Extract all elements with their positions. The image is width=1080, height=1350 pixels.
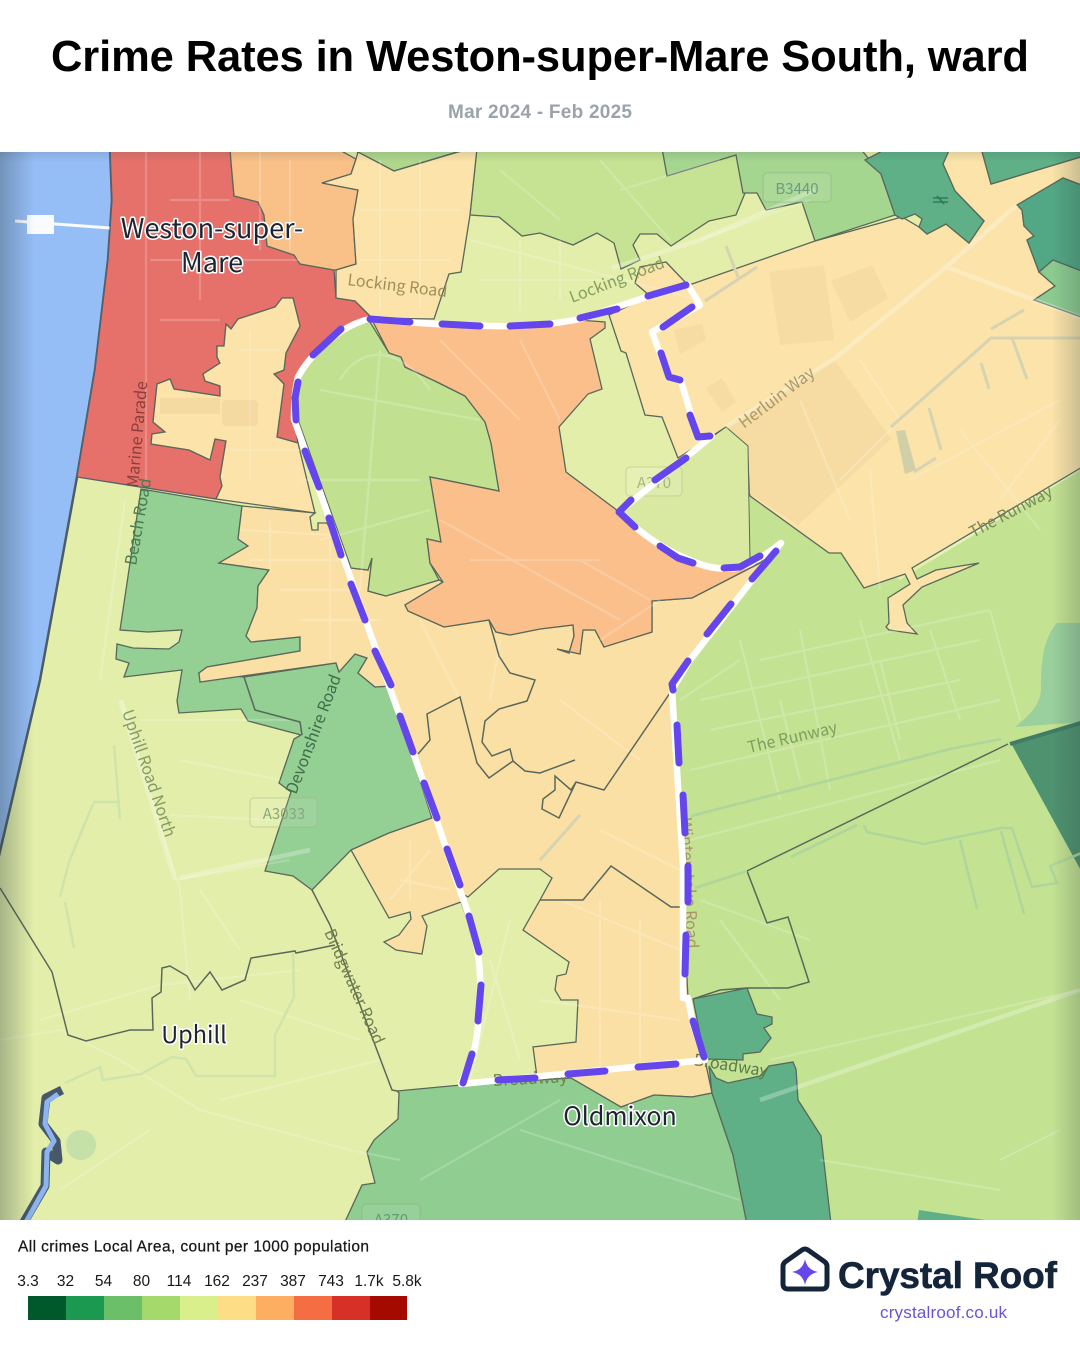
road label: Devonshire Road: Devonshire Road — [278, 670, 346, 797]
legend scale values: 5.8k — [392, 1273, 422, 1290]
faint channels Uphill — [60, 745, 294, 1083]
road label: Broadway east: Broadway — [692, 1046, 771, 1082]
place label: Weston-super-Mare: Mare — [181, 241, 243, 280]
region: cream north — [322, 148, 477, 319]
region: north-east medium green — [662, 148, 895, 241]
main roads — [120, 190, 1080, 1100]
road label: Bridgwater Road: Bridgwater Road — [319, 924, 392, 1048]
region: cream centre — [199, 506, 781, 1107]
region: dark green south pocket — [693, 988, 772, 1060]
other boundary lines — [0, 620, 1008, 1091]
legend scale values: 743 — [318, 1273, 344, 1290]
road label: Winterstoke Road: Winterstoke Road — [675, 817, 706, 949]
badge: B3440: B3440 — [775, 178, 819, 199]
badge: A370 south — [362, 1204, 420, 1233]
taxiway marks — [540, 246, 1080, 860]
title: Crime Rates in Weston-super-Mare South, ward — [51, 33, 1029, 81]
region: south green Oldmixon — [344, 1078, 747, 1224]
place label: Weston-super-Mare: Weston-super- — [121, 207, 303, 246]
legend scale values: 54 — [95, 1273, 112, 1290]
road label: The Runway east: The Runway — [964, 478, 1057, 542]
icon: house with star — [783, 1249, 827, 1289]
region: medium green right — [1034, 260, 1080, 318]
legend scale values: 114 — [167, 1273, 192, 1290]
road label: Herluin Way: Herluin Way — [733, 359, 819, 433]
region: south-east dark field — [1012, 723, 1080, 876]
coastline — [0, 148, 112, 860]
town-centre building blocks — [160, 398, 258, 426]
icon: railway station — [933, 196, 948, 204]
badge: B3440 — [763, 173, 831, 202]
region: dark green right — [1017, 178, 1080, 272]
dark drain line — [1010, 722, 1080, 744]
region: orange inside ward — [372, 320, 760, 654]
region: north green — [470, 148, 745, 269]
river — [24, 1090, 62, 1222]
legend scale values: 1.7k — [354, 1273, 384, 1290]
pond — [66, 1130, 96, 1160]
region: green inside ward — [298, 322, 499, 596]
logo: Crystal Roof — [780, 1246, 1058, 1322]
legend scale values: 80 — [133, 1273, 150, 1290]
legend colour bar — [28, 1296, 407, 1320]
website url: crystalroof.co.uk — [880, 1303, 1008, 1322]
road label: Locking Road west: Locking Road — [346, 266, 449, 302]
region: dark green south strip — [709, 1062, 831, 1224]
badge: A370 centre — [626, 467, 682, 496]
water channels — [691, 739, 1080, 914]
map: crime rate choropleth — [0, 152, 1080, 1220]
legend — [17, 1238, 422, 1320]
retail park and field blocks — [674, 265, 891, 525]
gray block — [896, 430, 916, 474]
region: east fields green — [672, 468, 1080, 1224]
badge: A3033 — [250, 798, 317, 827]
region: big east cream — [609, 148, 1080, 634]
region: town centre red — [77, 148, 372, 499]
region: north notch — [350, 148, 470, 171]
road label: Uphill Road North: Uphill Road North — [117, 706, 183, 840]
map edge vignette — [0, 152, 1080, 1220]
region: cream south lime patch — [461, 869, 578, 1085]
ward boundary: purple dashes — [295, 285, 776, 1083]
sea — [0, 148, 112, 860]
legend title: All crimes Local Area, count per 1000 population — [18, 1238, 369, 1256]
region: west green block — [116, 489, 432, 890]
ward boundary: white underlay — [294, 285, 781, 1084]
road label: Marine Parade: Marine Parade — [119, 380, 152, 488]
road network — [0, 152, 1080, 1200]
legend scale values: 387 — [280, 1273, 306, 1290]
pier — [15, 215, 110, 234]
wordmark: Crystal Roof — [838, 1255, 1058, 1296]
road label: Beach Road: Beach Road — [117, 476, 156, 567]
region: dark green bottom corner — [917, 1210, 985, 1224]
road label: Locking Road east: Locking Road — [565, 249, 667, 308]
badge: A370 centre: A370 — [637, 472, 671, 493]
badge: A3033: A3033 — [263, 803, 305, 824]
subtitle: date range: Mar 2024 - Feb 2025 — [448, 102, 632, 123]
legend scale values: 32 — [57, 1273, 74, 1290]
legend scale values — [17, 1273, 422, 1290]
region: dark green north-east — [865, 148, 984, 243]
region: dark green top right — [981, 148, 1080, 184]
place label: Weston-super-Mare — [121, 207, 303, 280]
road label: The Runway south: The Runway — [745, 714, 840, 758]
region: cream west — [151, 298, 315, 513]
place label: Uphill: Uphill — [161, 1016, 227, 1050]
place label: Oldmixon: Oldmixon — [563, 1097, 677, 1133]
region: lime patch inside ward east — [619, 427, 750, 570]
legend scale values: 237 — [242, 1273, 268, 1290]
region: orange north of centre — [230, 148, 358, 270]
road label: Broadway west: Broadway — [492, 1063, 569, 1091]
region: lake — [1015, 623, 1080, 727]
legend scale values: 162 — [204, 1273, 230, 1290]
legend scale values: 3.3 — [17, 1273, 39, 1290]
